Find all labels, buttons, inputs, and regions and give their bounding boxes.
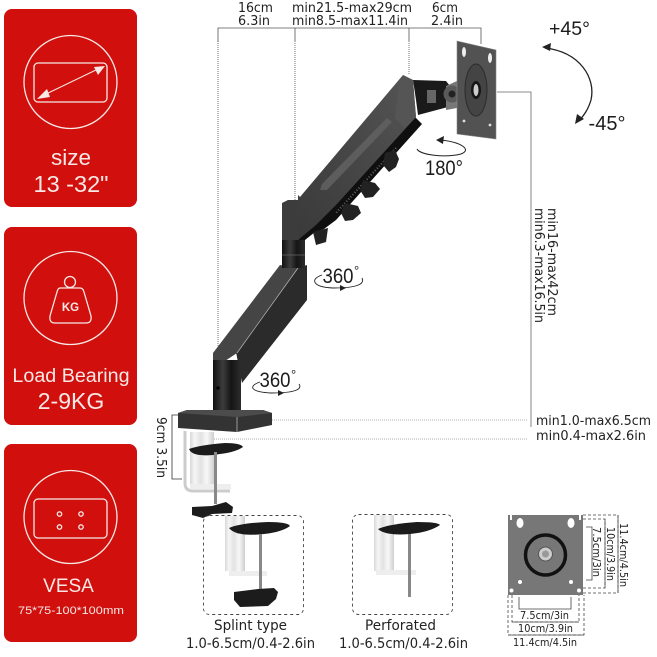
rotation: 180 degrees: 180° — [425, 157, 463, 180]
lower arm — [236, 265, 307, 383]
-45 label: -45° — [589, 113, 625, 135]
panel: load bearing — [4, 227, 137, 425]
size range: 13 -32" — [34, 171, 108, 197]
forearm link — [413, 80, 450, 115]
dimension: arm reach: min8.5-max11.4in — [292, 14, 408, 29]
rotation: 360 degrees lower: ° — [291, 367, 296, 382]
height dimension: min6.3-max16.5in — [531, 208, 546, 323]
rotation: 360 degrees upper: ° — [354, 263, 359, 278]
icon: kg weight: KG — [62, 302, 79, 314]
column — [213, 360, 241, 414]
dimension: 16cm: 16cm — [238, 1, 273, 16]
dimension: 6cm: 2.4in — [431, 14, 463, 29]
load bearing label: Load Bearing — [12, 365, 130, 387]
desk thickness dimensions: min0.4-max2.6in — [536, 429, 646, 444]
dimension: arm reach — [292, 1, 412, 29]
perforated caption: Perforated — [365, 618, 436, 634]
main clamp — [185, 431, 243, 518]
panel: splint type — [204, 516, 304, 614]
bottom labels: 7.5cm/3in — [520, 609, 569, 622]
dimension: 6cm: 6cm — [432, 1, 458, 16]
clamp height dimension — [153, 415, 182, 479]
rotation: 360 degrees lower: 360 — [260, 369, 290, 392]
bottom labels: 10cm/3.9in — [518, 622, 573, 635]
underside ribs — [298, 114, 422, 240]
panel: VESA — [4, 444, 137, 642]
desk thickness dimensions: min1.0-max6.5cm — [536, 414, 651, 429]
VESA plate diagram — [508, 515, 630, 649]
VESA plate — [457, 41, 496, 139]
base — [178, 410, 272, 432]
side labels: 7.5cm/3in — [590, 527, 603, 577]
icon: screen diagonal — [24, 36, 117, 128]
upper arm — [298, 75, 416, 240]
rotation: 360 degrees upper: 360 — [322, 265, 354, 288]
dimension: 16cm: 6.3in — [238, 14, 270, 29]
desk thickness dimensions — [208, 414, 651, 444]
elbow — [282, 200, 298, 240]
perforated clamp — [374, 515, 440, 597]
bottom labels: 11.4cm/4.5in — [513, 636, 577, 649]
dimension: 6cm — [431, 1, 463, 29]
tension knobs — [313, 150, 399, 245]
icon: VESA holes — [24, 470, 117, 564]
VESA label: VESA — [43, 576, 94, 597]
tilt arrow — [542, 18, 625, 135]
rotation: 180 degrees — [417, 136, 465, 180]
rotation: 360 degrees upper — [315, 263, 363, 291]
icon: kg weight — [24, 252, 117, 344]
bottom labels — [513, 609, 577, 649]
plate — [508, 515, 583, 595]
joint — [282, 240, 305, 268]
perforated caption: 1.0-6.5cm/0.4-2.6in — [339, 636, 468, 652]
bottom dimensions — [508, 595, 584, 635]
side labels: 11.4cm/4.5in — [617, 523, 630, 587]
rotation: 360 degrees lower — [253, 367, 300, 396]
height dimension: min16-max42cm — [544, 208, 559, 316]
splint caption: Splint type — [214, 618, 287, 634]
splint caption — [186, 618, 315, 652]
+45 label: +45° — [549, 18, 590, 40]
panel: perforated — [352, 514, 452, 614]
VESA sizes: 75*75-100*100mm — [18, 605, 124, 617]
clamp height dimension: 9cm 3.5in — [153, 417, 168, 478]
side labels: 10cm/3.9in — [604, 527, 617, 581]
monitor arm — [178, 41, 496, 432]
panel: size — [4, 9, 137, 207]
dimension: arm reach: min21.5-max29cm — [292, 1, 412, 16]
side labels — [590, 523, 630, 587]
load value: 2-9KG — [38, 388, 104, 414]
splint caption: 1.0-6.5cm/0.4-2.6in — [186, 636, 315, 652]
perforated caption — [339, 618, 468, 652]
size label: size — [51, 145, 91, 170]
height dimension — [497, 92, 559, 427]
dimension: 16cm — [238, 1, 273, 29]
side dimensions — [583, 515, 618, 593]
top dimension lines — [218, 28, 481, 347]
splint clamp — [225, 516, 290, 607]
